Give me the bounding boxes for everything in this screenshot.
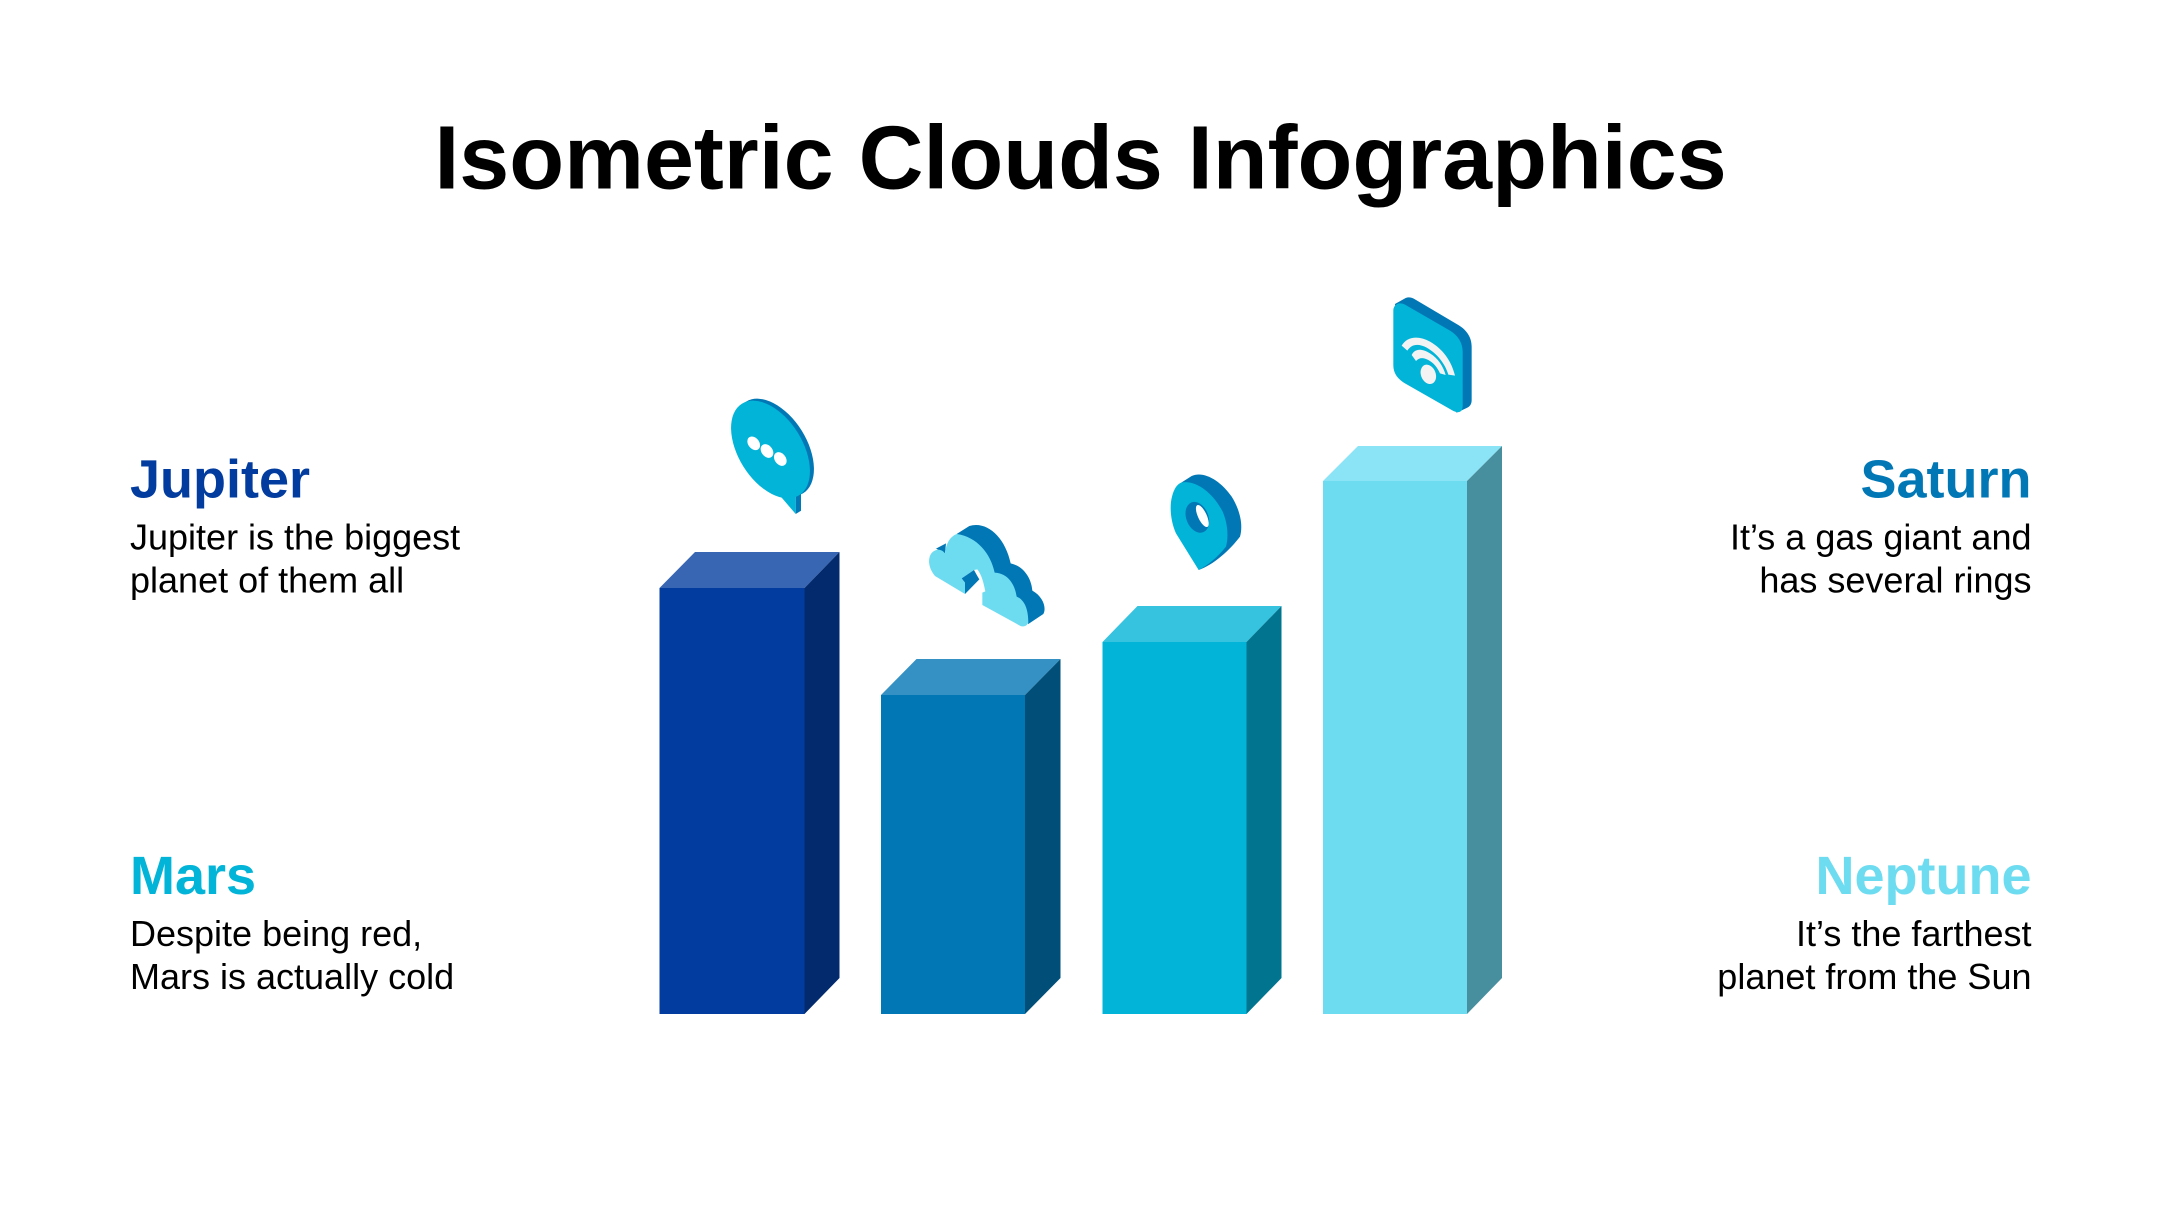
text block: Mars: Despite being red, xyxy=(130,913,422,954)
bar: Saturn xyxy=(881,659,1060,1014)
text block: Jupiter xyxy=(130,450,460,600)
text block: Saturn xyxy=(1730,450,2032,600)
text block: Neptune: Neptune xyxy=(1816,846,2032,906)
text block: Saturn: It’s a gas giant and xyxy=(1730,516,2032,558)
bar: Neptune xyxy=(1323,446,1502,1014)
bar: Jupiter xyxy=(660,552,840,1014)
text block: Jupiter: Jupiter xyxy=(130,450,310,510)
icon: location pin xyxy=(1171,474,1241,570)
text block: Mars xyxy=(130,846,454,997)
text block: Saturn: has several rings xyxy=(1759,560,2032,600)
text block: Jupiter: planet of them all xyxy=(130,560,404,600)
text block: Neptune: planet from the Sun xyxy=(1717,956,2032,997)
text block: Saturn: Saturn xyxy=(1860,450,2032,510)
text block: Jupiter: Jupiter is the biggest xyxy=(130,516,460,558)
bar: Mars xyxy=(1102,606,1282,1014)
title: Isometric Clouds Infographics xyxy=(434,108,1727,208)
text block: Mars: Mars is actually cold xyxy=(130,956,454,997)
icon: speech bubble xyxy=(715,385,830,514)
text block: Mars: Mars xyxy=(130,846,256,906)
icon: cloud xyxy=(929,525,1045,626)
text block: Neptune xyxy=(1717,846,2032,997)
text block: Neptune: It’s the farthest xyxy=(1796,913,2032,954)
icon: wifi tile xyxy=(1393,297,1472,413)
